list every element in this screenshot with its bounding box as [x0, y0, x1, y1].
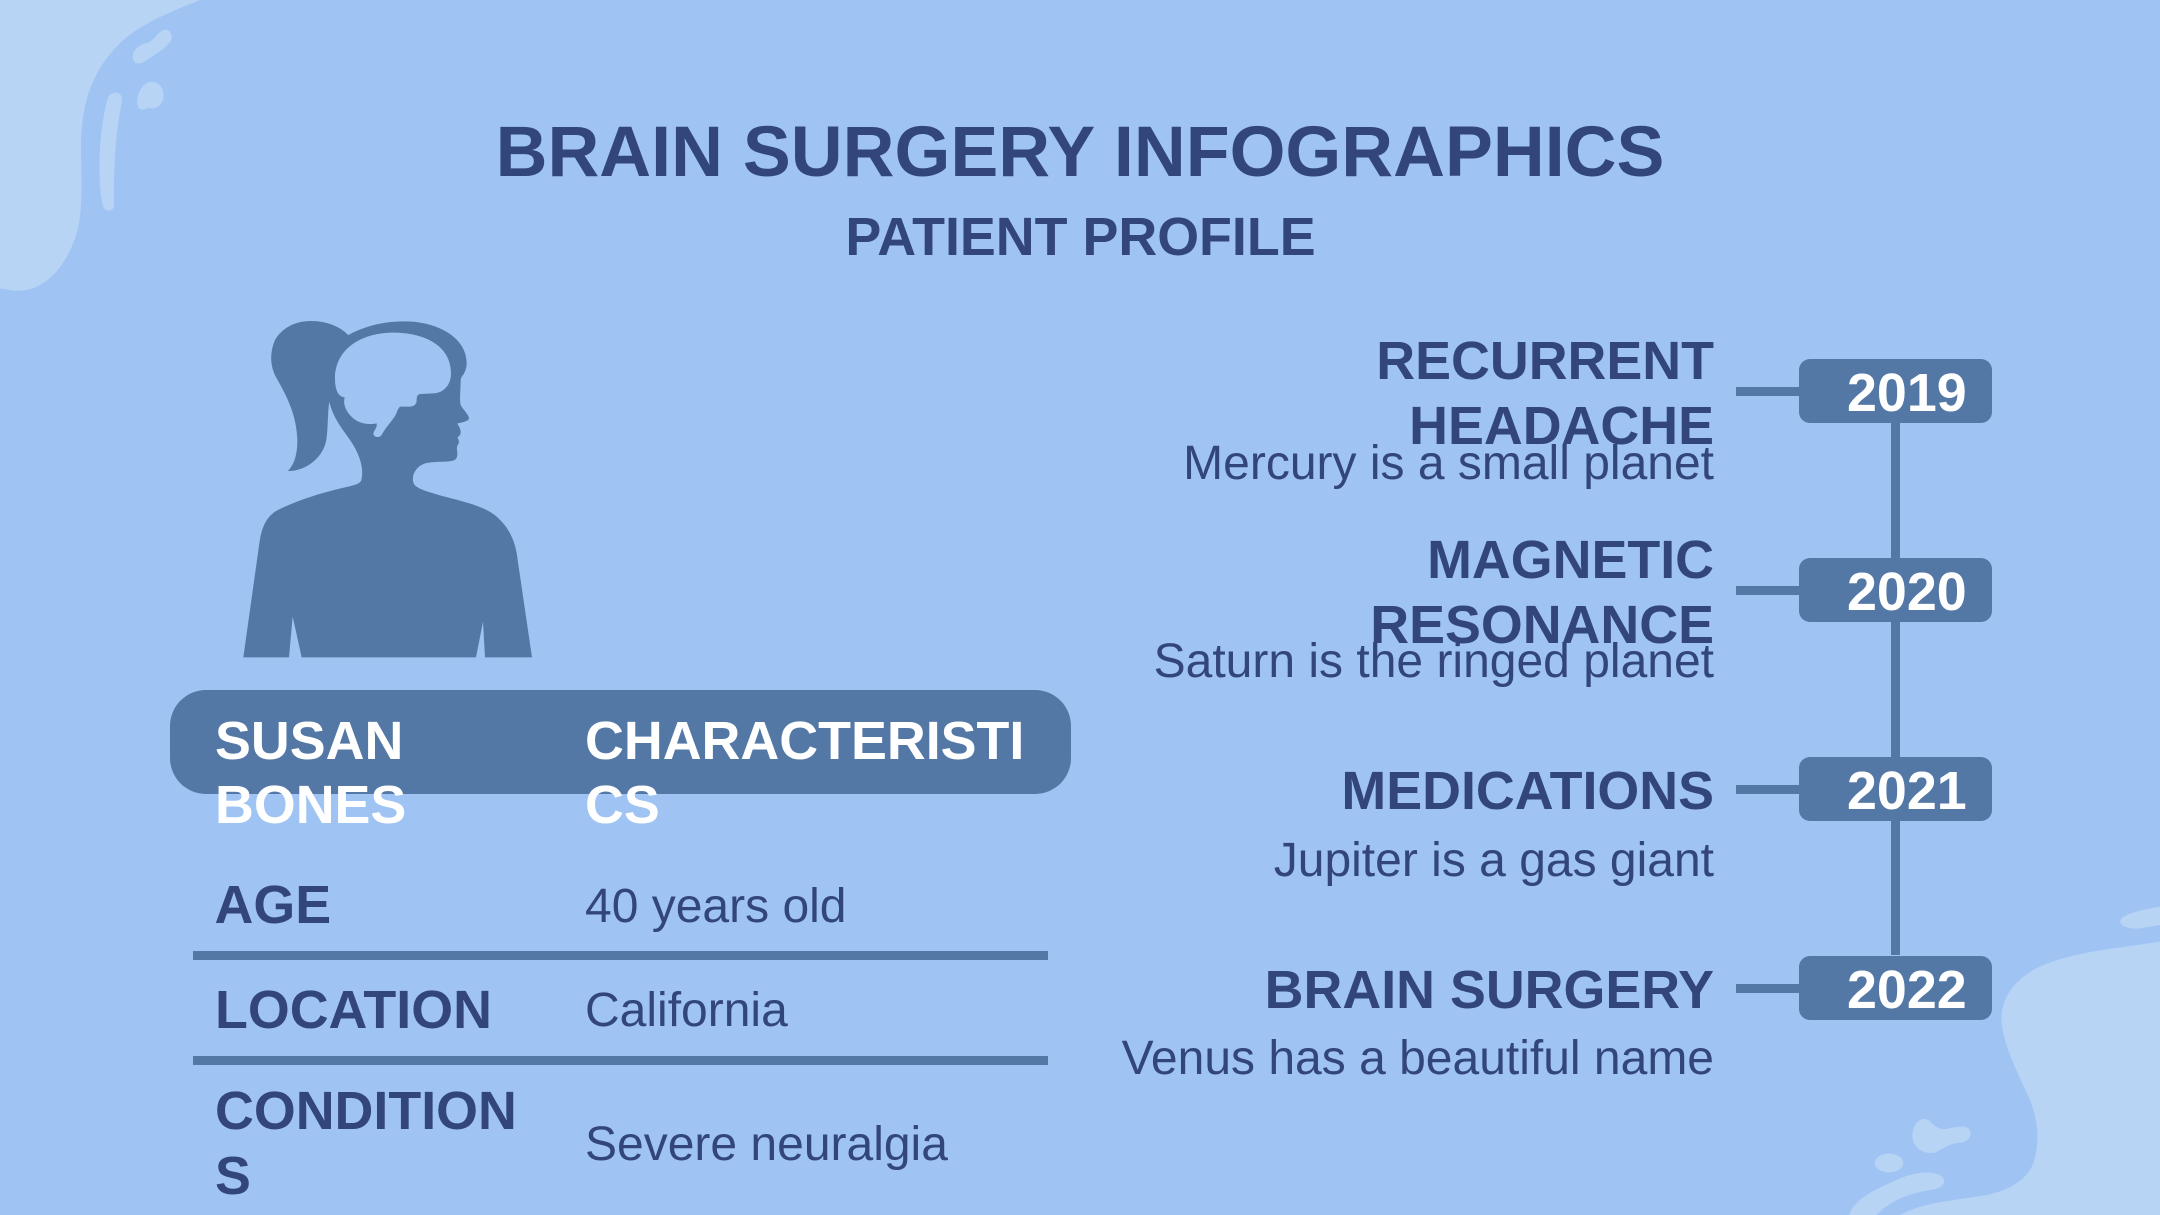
- table header bar: [170, 690, 1071, 794]
- description: Jupiter: Jupiter is a gas giant: [1274, 834, 1714, 887]
- header: characteristics: CS: [585, 775, 660, 835]
- year label 2019: 2019: [1847, 363, 1967, 423]
- timeline item: 2020: [1154, 530, 1992, 688]
- year label 2021: 2021: [1847, 761, 1967, 821]
- description: Mercury: Mercury is a small planet: [1183, 437, 1714, 490]
- row: age value: 40 years old: [585, 880, 846, 933]
- row: conditions value: Severe neuralgia: [585, 1118, 948, 1171]
- row: conditions label: S: [215, 1146, 251, 1206]
- description: Venus: Venus has a beautiful name: [1122, 1032, 1714, 1085]
- panel: patient table: [170, 690, 1071, 1206]
- decoration: top-left blob: [0, 0, 200, 291]
- heading: magnetic resonance: MAGNETIC: [1427, 530, 1714, 590]
- year connector: [1736, 984, 1799, 993]
- year label 2022: 2022: [1847, 960, 1967, 1020]
- heading: recurrent headache: RECURRENT: [1376, 331, 1714, 391]
- year connector: [1736, 785, 1799, 794]
- heading: recurrent headache: HEADACHE: [1409, 396, 1714, 456]
- decoration: bottom-right blob: [1849, 907, 2160, 1215]
- year badge 2021: [1799, 757, 1992, 821]
- year connector: [1736, 387, 1799, 396]
- year badge 2019: [1799, 359, 1992, 423]
- header: patient name: BONES: [215, 775, 406, 835]
- row: location label: LOCATION: [215, 980, 492, 1040]
- heading: magnetic resonance: RESONANCE: [1370, 595, 1714, 655]
- year badge 2022: [1799, 956, 1992, 1020]
- row: location value: California: [585, 984, 788, 1037]
- header: patient name: SUSAN: [215, 711, 403, 771]
- year label 2020: 2020: [1847, 562, 1967, 622]
- row: conditions label: CONDITION: [215, 1081, 517, 1141]
- year connector: [1736, 586, 1799, 595]
- subtitle: PATIENT PROFILE: [845, 207, 1316, 267]
- title: BRAIN SURGERY INFOGRAPHICS: [496, 112, 1664, 192]
- row: age label: AGE: [214, 875, 331, 935]
- timeline spine: [1891, 423, 1900, 955]
- description: Saturn: Saturn is the ringed planet: [1154, 635, 1714, 688]
- timeline item: 2022: [1122, 956, 1992, 1085]
- icon: woman silhouette with brain: [243, 321, 532, 657]
- header: characteristics: CHARACTERISTI: [585, 711, 1024, 771]
- heading: brain surgery: BRAIN SURGERY: [1265, 960, 1714, 1020]
- year badge 2020: [1799, 558, 1992, 622]
- timeline item: 2019: [1183, 331, 1992, 490]
- heading: medications: MEDICATIONS: [1341, 761, 1714, 821]
- timeline item: 2021: [1274, 757, 1992, 887]
